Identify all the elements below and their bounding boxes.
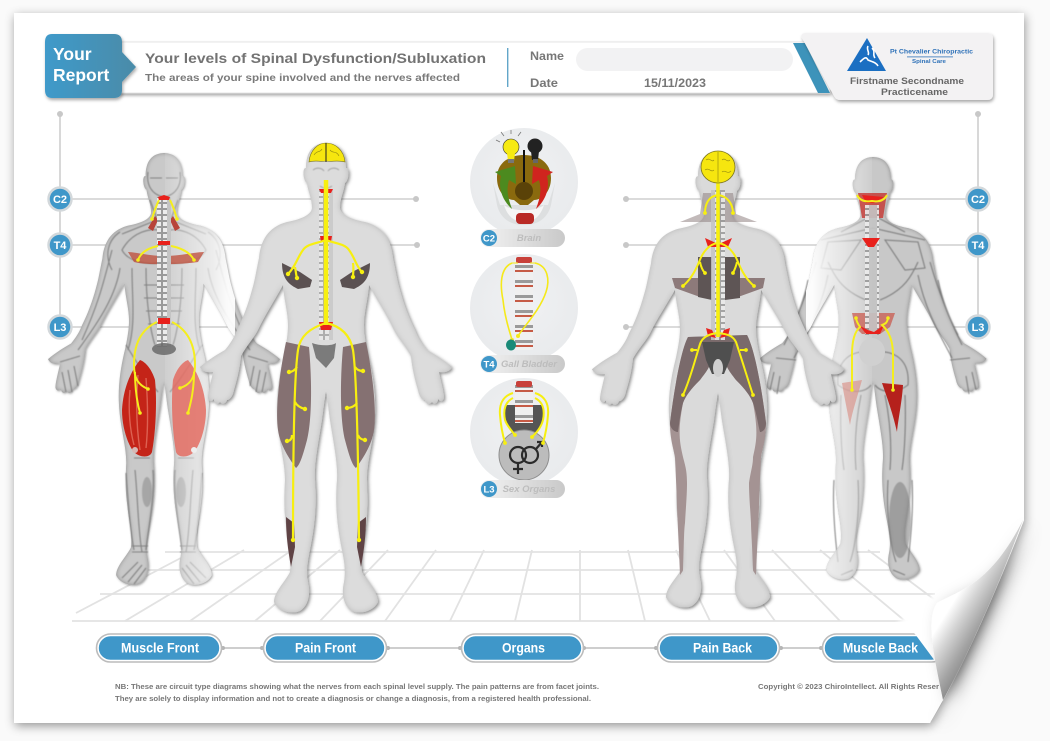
icon: gender symbols	[510, 442, 542, 474]
copyright: Copyright © 2023 ChiroIntellect. All Rights Reser	[758, 682, 939, 691]
pain areas: chest	[282, 263, 370, 289]
badge T4: T4	[972, 240, 985, 252]
icon: red arrow	[532, 166, 553, 209]
pelvis bone	[859, 338, 885, 366]
button: muscle back: Muscle Back	[843, 640, 918, 656]
button: pain front: Pain Front	[295, 640, 356, 656]
badges right	[966, 188, 990, 338]
muscle definition lines	[60, 172, 268, 584]
button: muscle front	[96, 634, 222, 662]
date field: 15/11/2023	[644, 76, 706, 90]
icon: brain	[497, 155, 551, 205]
icon: gall bladder	[506, 340, 516, 350]
button: organs: Organs	[502, 640, 545, 656]
badge T4	[966, 234, 990, 256]
fade overlay	[165, 150, 235, 600]
badge L3	[966, 316, 990, 338]
spine	[711, 190, 725, 340]
label pill: Gall Bladder	[501, 359, 558, 370]
practice card: Firstname Secondname	[850, 76, 964, 87]
nerves	[681, 180, 756, 397]
calf shading	[889, 482, 911, 558]
spine	[865, 205, 879, 335]
pelvis bone	[152, 343, 176, 355]
practice card	[802, 33, 993, 100]
practice card: Practicename	[881, 87, 948, 98]
spine	[157, 197, 171, 347]
name field: Name	[530, 49, 564, 63]
button: pain front	[264, 634, 386, 662]
button: pain back: Pain Back	[693, 640, 752, 656]
page curl	[905, 520, 1023, 723]
your report tag	[45, 34, 136, 98]
pain areas: thighs	[277, 342, 375, 468]
your report tag: Your	[53, 44, 92, 64]
spinal level highlights	[319, 189, 333, 330]
organ panel: gall bladder	[470, 254, 578, 373]
nerves	[285, 180, 367, 542]
icon: pelvis	[505, 405, 543, 435]
icon: vertebra	[516, 213, 534, 224]
footnote: NB: These are circuit type diagrams showing what the nerves from each spinal level supply. The pain patterns are from facet joints.	[115, 682, 599, 691]
practice card: Spinal Care	[912, 59, 946, 65]
pain areas: outer legs	[670, 335, 766, 575]
label pill: T4	[483, 360, 495, 370]
red muscles: chest band	[128, 252, 204, 264]
muscle definition lines	[770, 215, 976, 575]
label pill: C2	[483, 234, 495, 244]
button: muscle front: Muscle Front	[121, 640, 199, 656]
badge C2	[966, 188, 990, 210]
figure: muscle front	[48, 150, 280, 600]
figure: pain front	[200, 143, 452, 613]
practice card: Pt Chevalier Chiropractic	[890, 48, 973, 56]
label pill	[480, 480, 565, 498]
button: muscle back	[822, 634, 946, 662]
nerves	[850, 195, 895, 392]
icon: head outline	[493, 183, 555, 225]
badge C2: C2	[53, 194, 67, 206]
badge T4: T4	[54, 240, 67, 252]
pain areas: neck and shoulders	[680, 193, 757, 222]
badge T4	[48, 234, 72, 256]
pain areas: lower legs	[286, 517, 366, 567]
icon: spine	[515, 381, 533, 423]
organ panel: brain	[470, 128, 578, 247]
label pill	[480, 355, 565, 373]
footnote: They are solely to display information and not to create a diagnosis or change a diagnosis, from a registered health professional.	[115, 694, 591, 703]
icon: light bulbs	[496, 130, 542, 163]
brain	[701, 151, 735, 183]
icon: nerves	[500, 393, 548, 445]
icon: nerve loops	[501, 263, 548, 340]
label pill: Brain	[517, 233, 541, 244]
badge L3	[48, 316, 72, 338]
badge L3: L3	[972, 322, 984, 334]
floor grid	[72, 550, 935, 621]
calf shading	[142, 477, 186, 507]
badges left	[48, 188, 72, 338]
pain areas: mid back band	[672, 278, 765, 297]
paper fold highlight	[896, 590, 948, 640]
spinal level highlights	[158, 195, 170, 324]
icon: organ disc	[499, 430, 549, 480]
icon: logo triangle	[847, 38, 886, 71]
button: organs	[462, 634, 584, 662]
red muscles: left thigh	[122, 360, 156, 456]
guide lines: right	[623, 111, 981, 330]
red muscles: lumbar	[852, 313, 895, 334]
figure: pain back	[592, 151, 844, 607]
divider	[507, 48, 508, 87]
red muscles: right hamstring	[882, 383, 903, 432]
subheading: The areas of your spine involved and the nerves affected	[145, 73, 460, 84]
pelvis bone	[702, 342, 734, 374]
nerves	[134, 200, 196, 415]
spinal level highlights	[860, 195, 884, 334]
header bar	[45, 33, 993, 100]
label pill	[480, 229, 565, 247]
red muscles: neck	[148, 216, 180, 231]
badge L3: L3	[54, 322, 66, 334]
red muscles: neck	[858, 193, 887, 218]
red muscles: left hamstring	[842, 380, 862, 425]
organ panel: sex organs	[470, 378, 578, 498]
date field: Date	[530, 76, 558, 90]
heading: Your levels of Spinal Dysfunction/Subluxation	[145, 50, 486, 66]
face shading	[313, 168, 339, 188]
icon: green arrow	[495, 166, 516, 209]
pelvis bone	[312, 343, 336, 368]
your report tag: Report	[53, 65, 110, 85]
connectors	[221, 646, 823, 650]
spine	[319, 190, 333, 340]
button: pain back	[658, 634, 780, 662]
icon: spine	[515, 257, 533, 350]
badge C2: C2	[971, 194, 985, 206]
name field	[530, 48, 793, 71]
red muscles: right thigh	[172, 360, 206, 456]
guide lines: left	[57, 111, 420, 328]
pain areas: hips	[670, 335, 766, 432]
label pill: Sex Organs	[503, 484, 555, 495]
fade overlay	[806, 150, 872, 600]
badge C2	[48, 188, 72, 210]
label pill: L3	[483, 484, 495, 496]
footnote	[115, 682, 599, 703]
spinal level highlights	[705, 238, 732, 338]
brain	[309, 143, 345, 162]
figure: muscle back	[760, 150, 986, 600]
date field	[530, 76, 706, 90]
blue stripe	[793, 43, 830, 93]
